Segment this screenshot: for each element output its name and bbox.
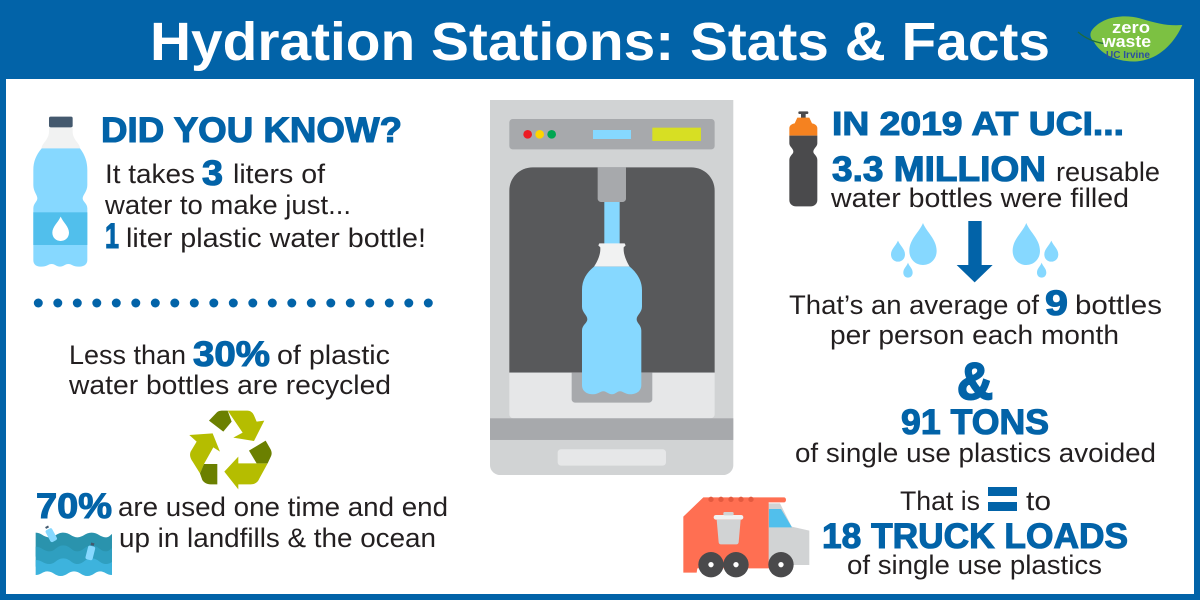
text block: less than 30 percent recycled bbox=[68, 335, 391, 400]
text block: 3 liters to make 1 liter bbox=[104, 154, 426, 256]
stat: 70 percent: 70% bbox=[36, 487, 112, 526]
icon: garbage truck bbox=[683, 497, 809, 577]
icon: ocean waves with bottles bbox=[36, 525, 112, 576]
text block: that is equal to bbox=[900, 486, 1051, 516]
text block: that is equal to: to bbox=[1026, 486, 1051, 516]
text block: less than 30 percent recycled: Less than bbox=[69, 340, 186, 370]
stat: 91 tons: 91 TONS bbox=[901, 403, 1049, 442]
logo: zero waste UC Irvine leaf bbox=[1078, 16, 1182, 61]
text: single use plastics avoided: of single use plastics avoided bbox=[795, 438, 1156, 468]
text: of single use plastics: of single use plastics bbox=[847, 550, 1102, 580]
text block: 9 bottles per person each month: per person each month bbox=[830, 320, 1119, 350]
text block: used one time: are used one time and end bbox=[118, 492, 448, 522]
illustration: hydration station bbox=[490, 100, 733, 475]
text block: that is equal to: That is bbox=[900, 486, 980, 516]
text block: 3 liters to make 1 liter: liters of bbox=[233, 159, 326, 189]
text block: 9 bottles per person each month bbox=[789, 284, 1162, 350]
text block: 3.3 million bottles filled bbox=[830, 150, 1160, 213]
title: Hydration Stations: Stats & Facts bbox=[150, 12, 1050, 72]
text block: used one time bbox=[118, 492, 448, 553]
text block: 3.3 million bottles filled: reusable bbox=[1056, 157, 1160, 187]
text block: less than 30 percent recycled: water bottles are recycled bbox=[68, 370, 391, 400]
text block: 3 liters to make 1 liter: liter plastic water bottle! bbox=[126, 223, 426, 253]
text block: 3.3 million bottles filled: 3.3 MILLION bbox=[832, 150, 1046, 189]
icon: plastic water bottle bbox=[33, 117, 87, 267]
text block: less than 30 percent recycled: 30% bbox=[193, 335, 270, 374]
text block: 3 liters to make 1 liter: 1 bbox=[105, 217, 119, 256]
text block: 3 liters to make 1 liter: It takes bbox=[105, 159, 195, 189]
ampersand: & bbox=[957, 353, 993, 411]
logo: zero waste UC Irvine leaf: UC Irvine bbox=[1106, 50, 1150, 61]
icon: water drops and down arrow bbox=[891, 221, 1058, 282]
logo: zero waste UC Irvine leaf: zero bbox=[1112, 18, 1150, 37]
icon: recycling symbol bbox=[189, 411, 272, 489]
text block: 3 liters to make 1 liter: 3 bbox=[202, 154, 223, 193]
text block: 3.3 million bottles filled: water bottles were filled bbox=[830, 183, 1129, 213]
text block: 9 bottles per person each month: 9 bbox=[1045, 284, 1068, 323]
text block: less than 30 percent recycled: of plastic bbox=[277, 340, 390, 370]
heading: did you know: DID YOU KNOW? bbox=[101, 111, 402, 150]
stat: 18 truck loads: 18 TRUCK LOADS bbox=[822, 517, 1128, 556]
text block: 9 bottles per person each month: bottles bbox=[1075, 290, 1162, 320]
text block: 9 bottles per person each month: That’s an average of bbox=[789, 290, 1039, 320]
icon: reusable sport bottle bbox=[789, 111, 817, 206]
text block: used one time: up in landfills & the ocean bbox=[119, 523, 436, 553]
logo: zero waste UC Irvine leaf: waste bbox=[1101, 32, 1151, 51]
text block: 3 liters to make 1 liter: water to make just... bbox=[104, 190, 351, 220]
heading: in 2019 at UCI: IN 2019 AT UCI... bbox=[832, 105, 1124, 142]
